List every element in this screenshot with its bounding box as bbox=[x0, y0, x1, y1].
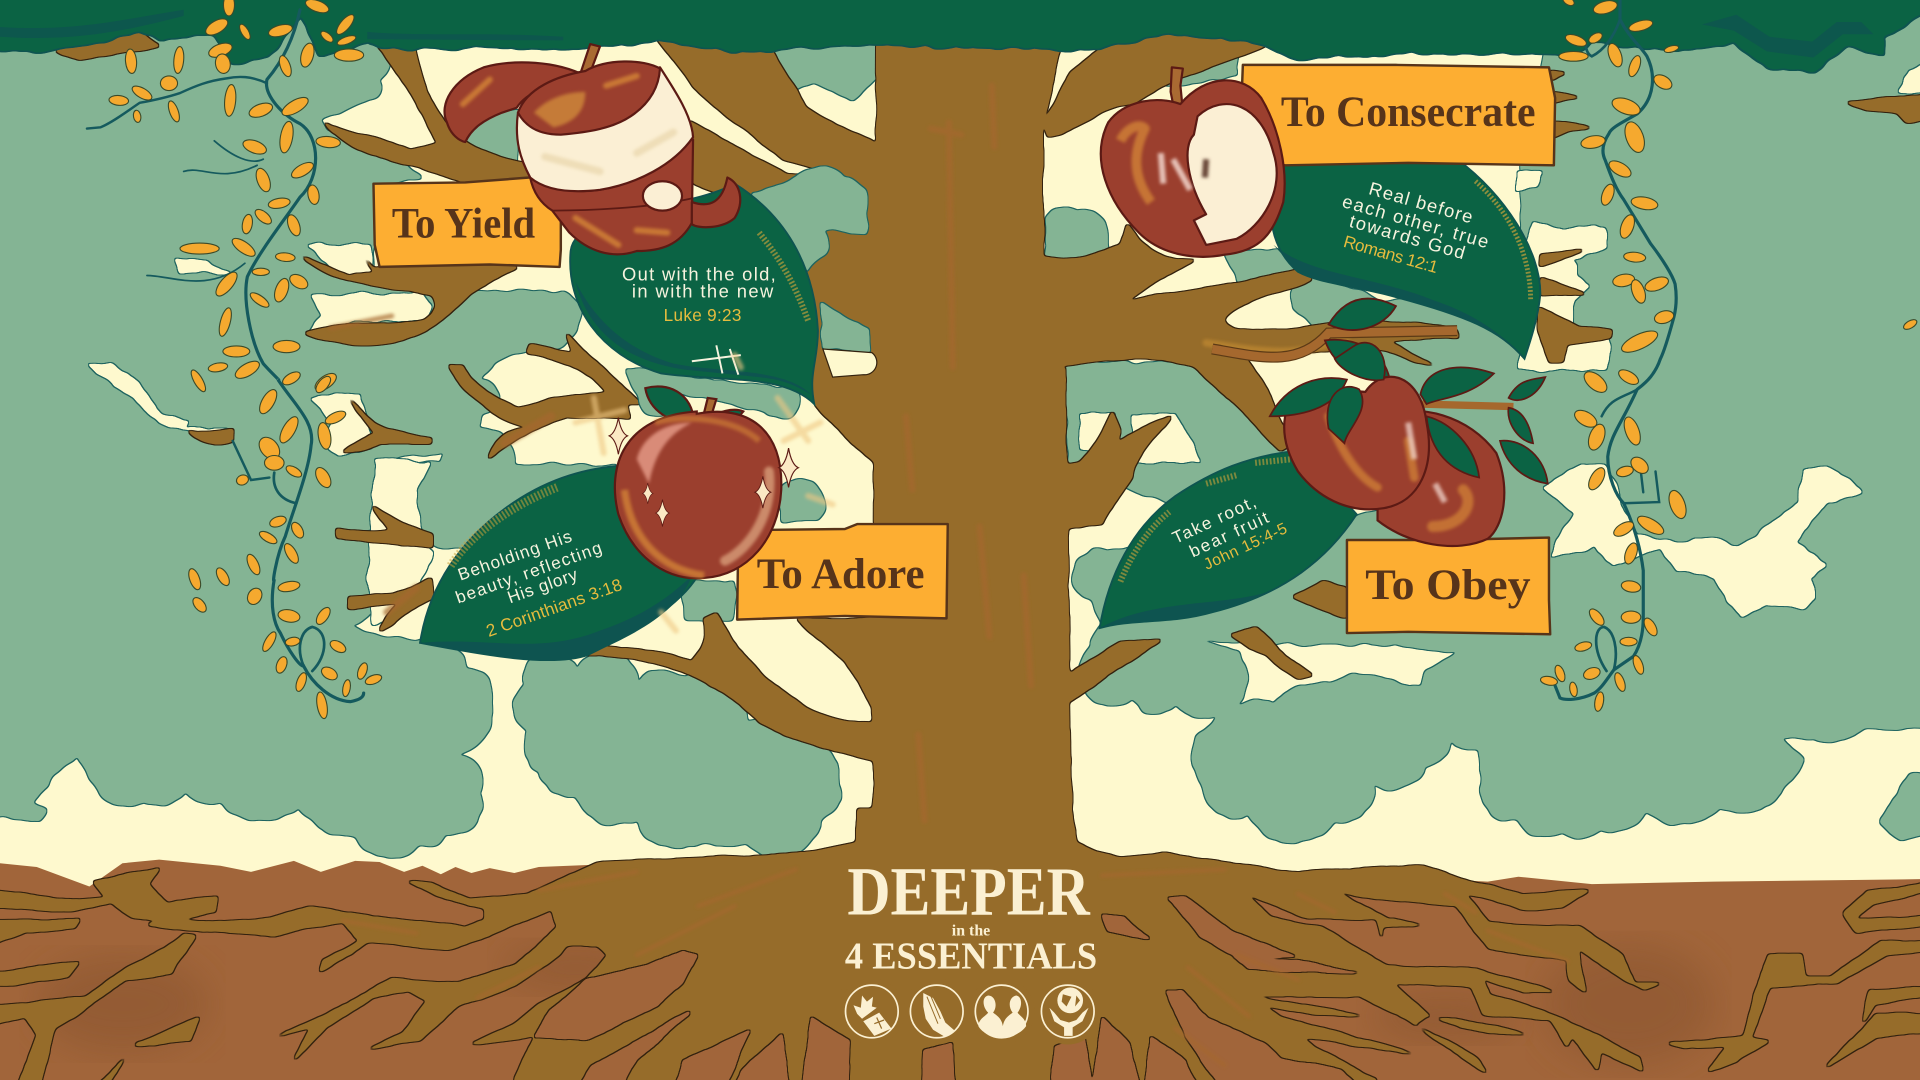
icon: praying hands bbox=[910, 985, 963, 1038]
leaf text: John bbox=[1169, 484, 1291, 581]
apple: shining bbox=[615, 386, 781, 578]
title block bbox=[845, 854, 1097, 978]
icon: dove and bible bbox=[846, 985, 898, 1038]
leaf text: Romans: towards God bbox=[1347, 210, 1468, 263]
panel: lower centre left cloud bbox=[514, 651, 840, 857]
sign: To Obey: To Obey bbox=[1365, 562, 1531, 609]
panel: cream gap beside trunk bbox=[823, 349, 877, 377]
leaf text: 2 Corinthians: 2 Corinthians 3:18 bbox=[483, 574, 625, 641]
panel: lower right corner clump bbox=[1881, 770, 1920, 840]
branches right of trunk bbox=[1043, 32, 1920, 704]
sign: To Consecrate: To Consecrate bbox=[1281, 89, 1536, 136]
leaf text: Romans: Real before bbox=[1367, 178, 1476, 227]
tree roots left bbox=[120, 808, 931, 1080]
icon: two people bbox=[975, 985, 1028, 1038]
branches left of trunk bbox=[54, 31, 877, 762]
panel: right teal foliage mass bbox=[1422, 0, 1920, 837]
leaf text: Romans: Romans 12:1 bbox=[1341, 231, 1441, 277]
soil wedges between roots bbox=[534, 896, 1376, 1080]
panel: clouds right of the trunk bbox=[1044, 44, 1592, 718]
leaf text: 2 Corinthians: His glory bbox=[505, 564, 581, 607]
apple: bitten bbox=[1101, 67, 1285, 257]
far right roots bbox=[1665, 880, 1920, 1071]
leaf text: Romans bbox=[1330, 171, 1497, 289]
tree trunk bbox=[796, 37, 1133, 862]
leaf text: John: Take root, bbox=[1169, 491, 1260, 548]
big leaf: To Yield bbox=[570, 184, 818, 404]
panel: clouds left of the trunk bbox=[391, 37, 884, 620]
sign: To Yield: To Yield bbox=[392, 201, 535, 248]
sign: To Yield bbox=[373, 175, 561, 267]
big leaf: To Consecrate bbox=[1271, 159, 1540, 359]
leaf text: John: John 15:4-5 bbox=[1201, 520, 1291, 574]
leaf text: 2 Corinthians: beauty, reflecting bbox=[453, 537, 605, 607]
panel: teal foliage masses and clouds bbox=[0, 0, 1920, 858]
sparkle glow strokes bbox=[576, 355, 833, 631]
orange bark shading on trunk and branches bbox=[331, 86, 1567, 1065]
sign: To Consecrate bbox=[1239, 65, 1555, 165]
panel: cream gaps in foliage bbox=[88, 56, 1920, 627]
leaf text: John: bear fruit bbox=[1186, 507, 1272, 561]
canopy top bbox=[0, 0, 1920, 72]
right vine bbox=[1555, 0, 1676, 699]
title block: in the bbox=[952, 923, 990, 940]
soil ground bbox=[0, 857, 1920, 1080]
big leaf: To Obey bbox=[1100, 451, 1357, 628]
fruit leaves on pair bbox=[1270, 343, 1548, 484]
title block: DEEPER bbox=[847, 854, 1091, 930]
apples: pair bbox=[1284, 377, 1504, 546]
big leaf: To Adore bbox=[420, 465, 698, 660]
sign: To Adore: To Adore bbox=[757, 551, 924, 598]
panel: left teal foliage mass bbox=[0, 0, 581, 858]
sparkles bbox=[609, 418, 798, 527]
apple: peeled bbox=[445, 44, 740, 254]
panel: lower centre right cloud bbox=[1192, 676, 1453, 843]
far left roots bbox=[0, 867, 218, 1080]
leaf text: 2 Corinthians bbox=[446, 515, 625, 647]
title block: 4 ESSENTIALS bbox=[845, 936, 1097, 978]
left vine bbox=[87, 10, 364, 702]
sign: To Obey bbox=[1347, 538, 1550, 634]
leaf text: Romans: each other, true bbox=[1340, 190, 1492, 252]
leaf text: Luke: Luke 9:23 bbox=[664, 305, 742, 325]
left vine leaves bbox=[109, 0, 383, 719]
panel: foliage in front of left branches bbox=[624, 166, 872, 418]
sign: To Adore bbox=[737, 524, 948, 620]
leaf text: Luke: in with the new bbox=[632, 281, 774, 302]
leaf text: 2 Corinthians: Beholding His bbox=[455, 526, 575, 585]
tree roots right bbox=[931, 808, 1663, 1080]
icon: globe in hands bbox=[1041, 985, 1094, 1038]
twig with fruit leaves bbox=[1212, 298, 1513, 407]
right vine leaves bbox=[1540, 0, 1918, 712]
essentials icon row bbox=[839, 978, 1101, 1044]
leaf text: Luke: Out with the old, bbox=[622, 263, 776, 284]
leaf text: Luke bbox=[622, 263, 776, 325]
